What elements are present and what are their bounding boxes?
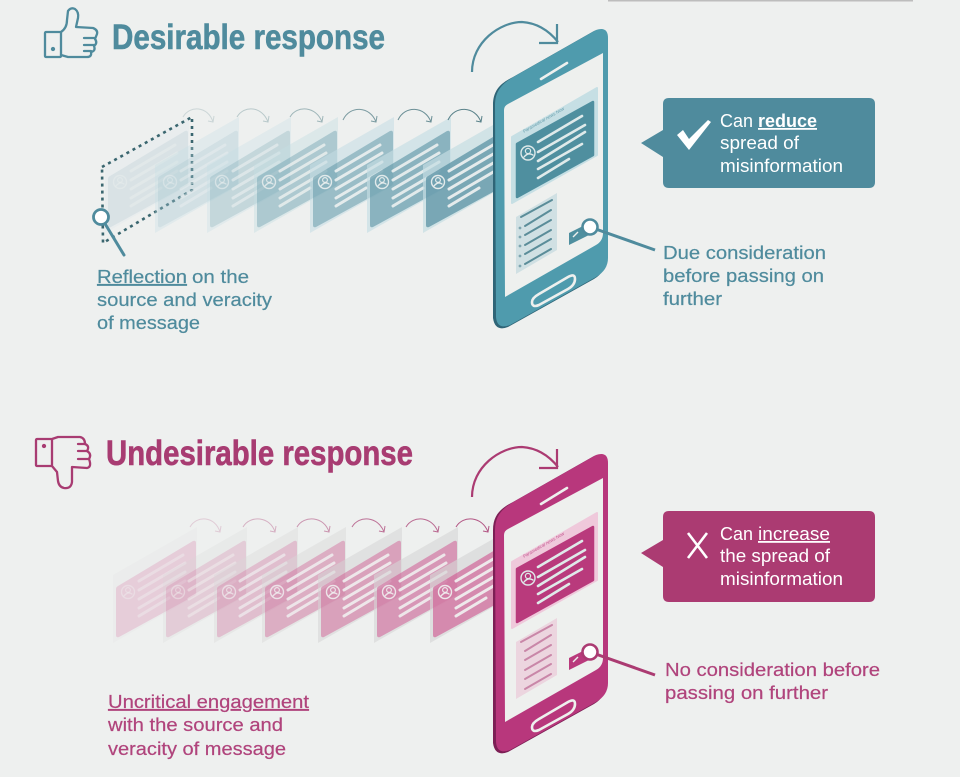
icon: thumbs down bbox=[36, 437, 90, 488]
text: uncritical engagement: veracity of message bbox=[108, 739, 286, 759]
magnifier marker bbox=[94, 210, 124, 255]
callout: can increase: the spread of bbox=[720, 546, 831, 566]
big arrow bbox=[472, 22, 558, 72]
text: uncritical engagement: with the source and bbox=[107, 715, 283, 735]
callout: can reduce: misinformation bbox=[720, 156, 843, 176]
text: no consideration: passing on further bbox=[665, 683, 828, 703]
callout: can increase bbox=[641, 511, 875, 602]
text: due consideration: Due consideration bbox=[663, 243, 826, 263]
text: uncritical engagement bbox=[107, 692, 309, 759]
callout: can reduce bbox=[641, 98, 875, 188]
panel: undesirable response bbox=[36, 434, 880, 759]
small arrows between cards bbox=[190, 519, 489, 532]
heading: undesirable response: Undesirable response bbox=[106, 434, 413, 473]
text: reflection: source and veracity bbox=[97, 290, 272, 310]
text: reflection: on the bbox=[192, 267, 249, 287]
text: no consideration bbox=[665, 660, 880, 703]
message cards moving to phone bbox=[102, 117, 507, 243]
callout: can reduce: reduce bbox=[758, 111, 817, 131]
text: due consideration bbox=[663, 243, 826, 309]
callout: can reduce: Can bbox=[720, 111, 753, 131]
heading: desirable response: Desirable response bbox=[112, 18, 385, 57]
callout: can increase: misinformation bbox=[720, 569, 843, 589]
text: due consideration: before passing on bbox=[663, 266, 824, 286]
text: no consideration: No consideration before bbox=[665, 660, 880, 680]
text: reflection: of message bbox=[97, 313, 200, 333]
callout: can increase: Can bbox=[720, 524, 753, 544]
big arrow bbox=[472, 447, 558, 497]
callout: can reduce: spread of bbox=[720, 133, 800, 153]
callout: can increase: increase bbox=[758, 524, 830, 544]
text: reflection: Reflection bbox=[97, 267, 187, 287]
panel: desirable response bbox=[45, 8, 875, 333]
dotted selection frame bbox=[102, 117, 192, 243]
text: uncritical engagement: Uncritical engagement bbox=[108, 692, 309, 712]
phone bbox=[493, 454, 655, 753]
text: due consideration: further bbox=[663, 289, 722, 309]
text: reflection bbox=[97, 267, 272, 333]
phone bbox=[493, 29, 655, 328]
message cards moving to phone bbox=[113, 527, 514, 643]
small arrows between cards bbox=[183, 109, 482, 122]
icon: thumbs up bbox=[45, 8, 97, 57]
